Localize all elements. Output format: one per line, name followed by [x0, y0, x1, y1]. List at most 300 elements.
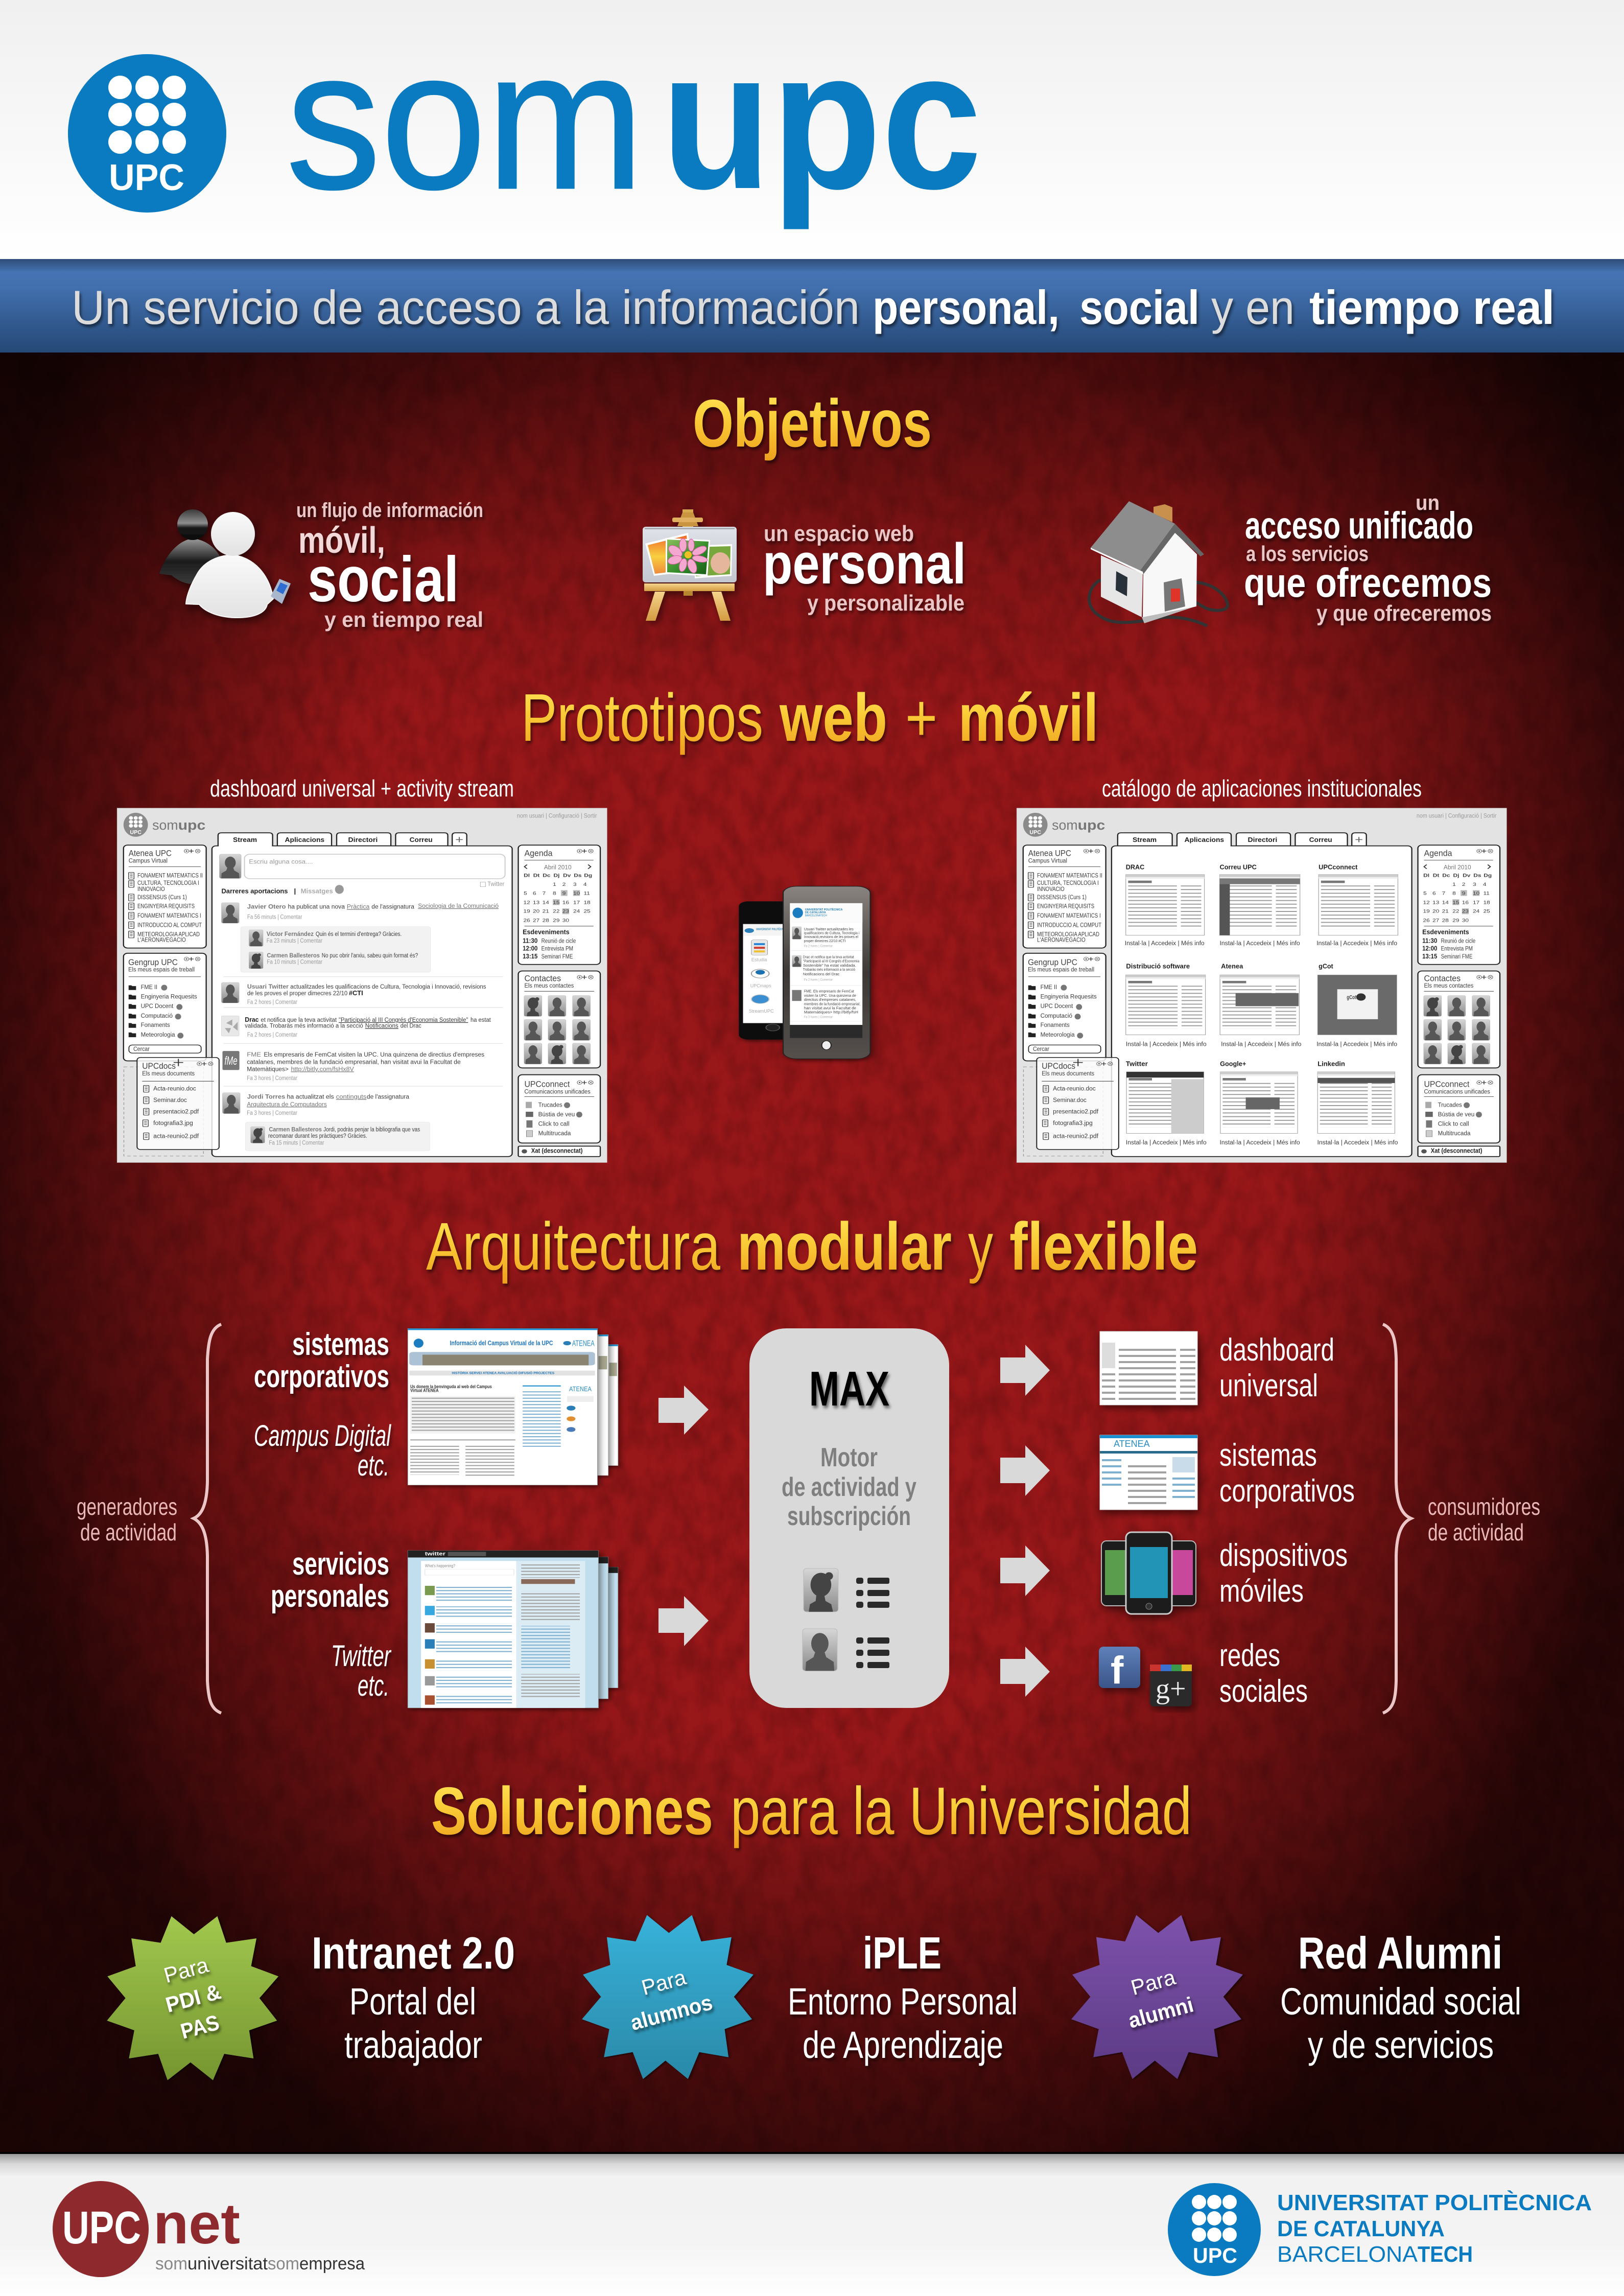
- icon: phones: BARCELONATECH: [805, 913, 827, 917]
- text: objective personal: un espacio web: [764, 521, 914, 546]
- right sidebar widgets: Dv: [563, 873, 571, 878]
- icon: phones: Innovació,revisions de les proves el: [804, 935, 858, 939]
- left sidebar widgets: CULTURA, TECNOLOGIA I: [137, 880, 199, 887]
- text: university name: BARCELONA: [1277, 2242, 1418, 2267]
- left sidebar widgets: FONAMENT MATEMATICS I: [137, 912, 201, 919]
- stream panel: ha publicat una nova: [288, 903, 345, 910]
- stream panel: Darreres aportacions: [221, 888, 288, 895]
- left sidebar widgets: Gengrup UPC: [1028, 958, 1077, 967]
- application catalog grid: Instal·la | Accedeix | Més info: [1316, 940, 1397, 947]
- icon: house: [1089, 501, 1228, 626]
- icon: phones: UNIVERSITAT POLITÈCNICA: [805, 908, 843, 911]
- right sidebar widgets: 2: [562, 882, 566, 887]
- logo: UPCnet: som: [155, 2254, 187, 2274]
- right sidebar widgets: Dl: [1423, 873, 1429, 878]
- stream panel: Carmen Ballesteros: [267, 952, 320, 959]
- stream panel: |: [294, 888, 296, 895]
- left sidebar widgets: Atenea UPC: [1028, 849, 1071, 858]
- right sidebar widgets: Dg: [584, 873, 592, 878]
- right sidebar widgets: 17: [1473, 900, 1479, 905]
- text: redes sociales: redes: [1219, 1638, 1280, 1673]
- text: dispositivos móviles: móviles: [1219, 1574, 1304, 1609]
- stream panel: Sociologia de la Comunicació: [418, 903, 499, 909]
- right sidebar widgets: Reunió de cicle: [542, 938, 576, 945]
- right sidebar widgets: Entrevista PM: [1441, 945, 1473, 952]
- right sidebar widgets: 13: [533, 900, 539, 905]
- right sidebar widgets: 5: [1423, 891, 1427, 896]
- arrow: MAX to dashboard: [1000, 1345, 1050, 1396]
- text: objective personal: y personalizable: [807, 591, 964, 616]
- logo: UPCnet: som: [268, 2254, 299, 2274]
- badge: Para PDI & PAS: PAS: [178, 2010, 222, 2044]
- panel: catalog mockup: [1017, 808, 1507, 1163]
- text: dispositivos móviles: [1219, 1538, 1348, 1609]
- right sidebar widgets: [519, 845, 600, 1157]
- left sidebar widgets: ENGINYERIA REQUISITS: [1037, 903, 1094, 910]
- stream panel: Notificacions: [365, 1022, 398, 1029]
- text: iPLE: Entorno Personal: [788, 1980, 1018, 2023]
- subtitle: y en: [1211, 280, 1295, 334]
- right sidebar widgets: 22: [1452, 909, 1460, 914]
- subtitle: Un servicio de acceso a la información: [72, 280, 860, 334]
- left sidebar widgets: Atenea UPC: [129, 849, 172, 858]
- icon: people: [159, 509, 291, 618]
- icon: phones: Usuari Twitter actualitzades les: [804, 927, 854, 931]
- user subscription 1: [804, 1568, 889, 1612]
- blue subtitle band: [0, 259, 1624, 353]
- right sidebar widgets: 13:15: [1422, 953, 1437, 960]
- stream panel: Fa 3 hores | Comentar: [247, 1074, 297, 1082]
- stream panel: No puc obrir l'arxiu, sabeu quin format és?: [322, 952, 418, 959]
- application catalog grid: Instal·la | Accedeix | Més info: [1316, 1041, 1397, 1048]
- heading: Arquitectura modular y flexible: y: [968, 1209, 993, 1284]
- text: objective social: un flujo de información: [296, 499, 483, 522]
- right sidebar widgets: Abril 2010: [1444, 864, 1471, 871]
- panel: catalog mockup: upc: [1078, 818, 1105, 833]
- left sidebar widgets: L'AERONAVEGACIO: [1037, 936, 1086, 944]
- stream panel: Fa 10 minuts | Comentar: [267, 958, 322, 966]
- left sidebar widgets: UPC Docent: [141, 1003, 173, 1010]
- stream panel: Els empresaris de FemCat visiten la UPC. Una quinzena de directius d'empreses: [264, 1051, 484, 1058]
- icon: phones: proper dimecres 22/10 #CTI: [804, 939, 846, 943]
- application catalog grid: Instal·la | Accedeix | Més info: [1317, 1139, 1398, 1146]
- icon: phones: Fa 3 hores | Comentar: [804, 1015, 833, 1019]
- subtitle: social: [1079, 280, 1199, 334]
- right sidebar widgets: Entrevista PM: [542, 945, 573, 952]
- right sidebar widgets: 25: [584, 909, 591, 914]
- text: Intranet 2.0: Portal del: [349, 1980, 476, 2023]
- panel: dashboard mockup: UPC: [130, 829, 142, 835]
- logo: UPCnet: net: [153, 2192, 240, 2256]
- caption: catalog: catálogo de aplicaciones institucionales: [1102, 775, 1422, 802]
- screenshots: Atenea page stack: ATENEA: [572, 1339, 595, 1348]
- icon: phones: "Participació al III Congrés d'Economia: [803, 959, 859, 964]
- heading: Arquitectura modular y flexible: Arquitectura: [426, 1209, 720, 1284]
- text: sistemas corporativos: [1219, 1438, 1355, 1509]
- text: sistemas corporativos: sistemas: [1219, 1438, 1317, 1473]
- right sidebar widgets: Trucades: [538, 1102, 562, 1109]
- right sidebar widgets: 26: [523, 918, 530, 923]
- stream panel: [212, 844, 512, 1157]
- right sidebar widgets: Dt: [1433, 873, 1440, 878]
- right sidebar widgets: 29: [553, 918, 560, 923]
- tabs: Correu: [1309, 837, 1332, 844]
- logo: UPCnet: [53, 2181, 365, 2277]
- right sidebar widgets: Trucades: [1438, 1102, 1462, 1109]
- text: sistemas corporativos: sistemas: [292, 1327, 389, 1362]
- left sidebar widgets: presentacio2.pdf: [1053, 1108, 1098, 1115]
- tabs: Aplicacions: [1185, 837, 1224, 844]
- stream panel: Fa 2 hores | Comentar: [247, 1032, 297, 1039]
- left sidebar widgets: FONAMENT MATEMATICS I: [1037, 912, 1101, 919]
- stream panel: Usuari Twitter: [247, 983, 289, 991]
- tabs: Aplicacions: [285, 837, 324, 844]
- left sidebar widgets: Meteorologia: [1041, 1032, 1075, 1039]
- stream panel: Pràctica: [347, 903, 369, 910]
- application catalog grid: Distribució software: [1126, 963, 1190, 970]
- right sidebar widgets: 5: [524, 891, 527, 896]
- right sidebar widgets: 4: [583, 882, 587, 887]
- right sidebar widgets: 29: [1452, 918, 1460, 923]
- screenshots: Atenea page stack: Us donem la benvinguda al web del Campus: [410, 1384, 492, 1389]
- screenshots: Atenea page stack: [408, 1328, 618, 1485]
- badge: Para PDI & PAS: [107, 1916, 278, 2080]
- text: servicios personales: personales: [271, 1579, 389, 1614]
- right sidebar widgets: 21: [1442, 909, 1449, 914]
- text: objective personal: personal: [763, 532, 966, 596]
- right sidebar widgets: Contactes: [1424, 974, 1461, 983]
- text: objective unified access: [1244, 490, 1492, 626]
- text: Intranet 2.0: trabajador: [344, 2024, 482, 2066]
- text: university name: TECH: [1418, 2242, 1473, 2267]
- right sidebar widgets: Ds: [574, 873, 582, 878]
- right sidebar widgets: Dt: [533, 873, 540, 878]
- right sidebar widgets: 7: [1442, 891, 1445, 896]
- icon: phones: [739, 886, 870, 1059]
- right sidebar widgets: 21: [543, 909, 549, 914]
- text: objective social: social: [308, 544, 459, 615]
- tabs: Directori: [1248, 837, 1277, 844]
- left sidebar widgets: Campus Virtual: [129, 857, 168, 864]
- text: sistemas corporativos: corporativos: [254, 1359, 389, 1394]
- application catalog grid: UPCconnect: [1319, 864, 1358, 871]
- left sidebar widgets: Computació: [1041, 1012, 1072, 1019]
- left sidebar widgets: FME II: [1041, 984, 1057, 991]
- left sidebar widgets: INTRODUCCIO AL COMPUT: [137, 922, 202, 929]
- stream panel: fMe: [224, 1054, 238, 1067]
- right sidebar widgets: 11:30: [523, 938, 537, 945]
- stream panel: del Drac: [401, 1022, 421, 1029]
- heading: Arquitectura modular y flexible: [426, 1209, 1198, 1284]
- logo: UPC footer: UPC: [1193, 2243, 1237, 2267]
- icon: phones: Fa 2 hores | Comentar: [804, 978, 833, 981]
- text: Red Alumni: Red Alumni: [1298, 1928, 1502, 1978]
- right sidebar widgets: 25: [1484, 909, 1490, 914]
- logo: UPC circle: UPC: [109, 157, 184, 198]
- logo wordmark: somupc: som: [286, 9, 644, 230]
- right sidebar widgets: Click to call: [1438, 1120, 1469, 1128]
- right sidebar widgets: 24: [573, 909, 580, 914]
- stream panel: Javier Otero: [247, 903, 286, 910]
- left sidebar widgets: Els meus espais de treball: [1028, 966, 1094, 973]
- right sidebar widgets: 19: [523, 909, 530, 914]
- left sidebar widgets: fotografia3.jpg: [153, 1120, 193, 1127]
- MAX description: subscripción: [787, 1502, 911, 1531]
- caption: dashboard: dashboard universal + activity stream: [210, 775, 514, 802]
- badge: Para alumni: [1071, 1915, 1243, 2079]
- text: objective unified access: que ofrecemos: [1244, 560, 1492, 605]
- label: consumidores de actividad: consumidores: [1428, 1493, 1540, 1520]
- left sidebar widgets: fotografia3.jpg: [1053, 1120, 1093, 1127]
- icon: phones: Notificacions del Drac: [803, 972, 839, 976]
- application catalog grid: Instal·la | Accedeix | Més info: [1220, 1139, 1300, 1146]
- tabs: [218, 833, 467, 846]
- text: dashboard universal: universal: [1219, 1368, 1318, 1403]
- stream panel: Arquitectura de Computadors: [247, 1101, 327, 1108]
- stream panel: Matemàtiques>: [247, 1066, 289, 1073]
- left sidebar widgets: Els meus documents: [1042, 1070, 1094, 1077]
- application catalog grid: Correu UPC: [1220, 864, 1257, 871]
- left sidebar widgets: Els meus documents: [142, 1070, 195, 1077]
- heading: Objetivos: Objetivos: [693, 386, 932, 461]
- left sidebar widgets: [1023, 845, 1119, 1156]
- stream panel: de les proves el proper dimecres 22/10: [247, 990, 347, 997]
- badge: Para alumnos: [582, 1915, 754, 2079]
- right sidebar widgets: 30: [562, 918, 569, 923]
- header background: [0, 0, 1624, 261]
- right sidebar widgets: Dc: [1442, 873, 1450, 878]
- stream panel: Fa 3 hores | Comentar: [247, 1110, 297, 1117]
- panel: catalog mockup: UPC: [1029, 829, 1041, 835]
- icon: easel: [643, 509, 737, 621]
- left sidebar widgets: DISSENSUS (Curs 1): [137, 894, 187, 901]
- text: objective social: móvil,: [298, 520, 385, 561]
- stream panel: ha actualitzat els: [287, 1093, 334, 1100]
- right sidebar widgets: Reunió de cicle: [1441, 938, 1475, 945]
- thumbnail: corporate systems: ATENEA: [1114, 1439, 1150, 1449]
- right sidebar widgets: 24: [1473, 909, 1479, 914]
- text: sistemas corporativos: [254, 1327, 391, 1482]
- left sidebar widgets: UPCdocs: [1042, 1062, 1075, 1071]
- text: university name: UNIVERSITAT POLITÈCNICA: [1277, 2190, 1592, 2215]
- right sidebar widgets: 18: [1484, 900, 1490, 905]
- arrow: generators to MAX (top): [658, 1386, 709, 1435]
- screenshots: Atenea page stack: Informació del Campus Virtual de la UPC: [450, 1340, 553, 1347]
- right sidebar widgets: Ds: [1473, 873, 1481, 878]
- left sidebar widgets: Fonaments: [141, 1022, 170, 1029]
- right sidebar widgets: Dg: [1484, 873, 1492, 878]
- right sidebar widgets: 8: [553, 891, 556, 896]
- left sidebar widgets: FONAMENT MATEMATICS II: [1037, 872, 1102, 879]
- text: Red Alumni: [1280, 1928, 1521, 2066]
- badge: Para PDI & PAS: PDI &: [163, 1979, 223, 2017]
- right sidebar widgets: 10: [573, 891, 580, 896]
- right sidebar widgets: 15: [553, 900, 560, 905]
- icon: phones: Matemàtiques> http://bitly/fsH: [804, 1011, 858, 1015]
- right sidebar widgets: 8: [1452, 891, 1456, 896]
- text: university name: [1277, 2190, 1592, 2267]
- right sidebar widgets: 16: [1462, 900, 1469, 905]
- heading: Arquitectura modular y flexible: modular: [737, 1209, 952, 1284]
- panel: dashboard mockup: upc: [178, 818, 205, 833]
- label: consumidores de actividad: de actividad: [1428, 1519, 1524, 1545]
- right sidebar widgets: 28: [1442, 918, 1449, 923]
- stream panel: Carmen Ballesteros: [269, 1126, 322, 1133]
- left sidebar widgets: Acta-reunio.doc: [153, 1085, 196, 1092]
- tabs: Correu: [410, 837, 433, 844]
- text: university name: DE CATALUNYA: [1277, 2216, 1445, 2241]
- right sidebar widgets: Seminari FME: [1441, 953, 1472, 960]
- badge: Para alumnos: Para: [639, 1965, 689, 2000]
- icon: phones: UNIVERSITAT POLITÈCNICA: [756, 927, 788, 931]
- left sidebar widgets: Seminar.doc: [1053, 1097, 1087, 1104]
- text: iPLE: iPLE: [863, 1928, 942, 1978]
- badge: Para alumni: Para: [1128, 1965, 1178, 2000]
- right sidebar widgets: 6: [533, 891, 536, 896]
- left sidebar widgets: presentacio2.pdf: [153, 1108, 199, 1115]
- subtitle: [72, 280, 1555, 334]
- stream panel: Jordi, podràs penjar la bibliografia que vas: [323, 1126, 420, 1133]
- right sidebar widgets: 12: [523, 900, 530, 905]
- right sidebar widgets: 27: [533, 918, 539, 923]
- MAX description: Motor: [820, 1443, 878, 1472]
- application catalog grid: Instal·la | Accedeix | Més info: [1126, 1139, 1207, 1146]
- right sidebar widgets: 4: [1483, 882, 1487, 887]
- logo: UPC footer: [1168, 2183, 1261, 2276]
- badge: Para PDI & PAS: Para: [161, 1953, 211, 1987]
- application catalog grid: gCot: [1319, 963, 1333, 970]
- right sidebar widgets: Contactes: [524, 974, 561, 983]
- left sidebar widgets: FME II: [141, 984, 157, 991]
- thumbnail: dashboard: [1100, 1331, 1197, 1405]
- stream panel: http://bitly.com/fsHx8V: [291, 1066, 354, 1073]
- right sidebar widgets: 20: [1432, 909, 1439, 914]
- right sidebar widgets: 3: [573, 882, 577, 887]
- left sidebar widgets: ENGINYERIA REQUISITS: [137, 903, 195, 910]
- icon: phones: StreamUPC: [749, 1009, 774, 1014]
- text: Intranet 2.0: [312, 1928, 515, 2066]
- red textured background: [0, 353, 1624, 2153]
- icon: phones: Sostenible" ha estat validada.: [803, 964, 856, 968]
- right sidebar widgets: 3: [1473, 882, 1476, 887]
- left sidebar widgets: INNOVACIO: [137, 886, 165, 893]
- stream panel: ha estat: [470, 1017, 491, 1023]
- right sidebar widgets: 13:15: [523, 953, 537, 960]
- right sidebar widgets: 20: [533, 909, 539, 914]
- right sidebar widgets: Dl: [524, 873, 530, 878]
- stream panel: Escriu alguna cosa....: [249, 858, 313, 865]
- application catalog grid: Instal·la | Accedeix | Més info: [1126, 1041, 1207, 1048]
- label: generadores de actividad: de actividad: [80, 1519, 177, 1545]
- right sidebar widgets: 1: [1452, 882, 1456, 887]
- stream panel: Missatges: [301, 888, 333, 895]
- stream panel: Fa 23 minuts | Comentar: [267, 938, 322, 944]
- tabs: Stream: [1133, 837, 1157, 844]
- left sidebar widgets: Acta-reunio.doc: [1053, 1085, 1096, 1092]
- right sidebar widgets: Click to call: [538, 1120, 570, 1128]
- stream panel: de l'assignatura: [371, 903, 414, 910]
- right sidebar widgets: 12:00: [523, 945, 537, 952]
- left sidebar widgets: Computació: [141, 1012, 173, 1019]
- right sidebar widgets: 12:00: [1422, 945, 1437, 952]
- stream panel: Fa 56 minuts | Comentar: [247, 913, 302, 921]
- right sidebar widgets: Xat (desconnectat): [1431, 1147, 1482, 1155]
- stream panel: recomanar durant les pràctiques? Gràcies.: [268, 1133, 367, 1139]
- stream panel: de l'assignatura: [367, 1093, 409, 1100]
- subtitle: tiempo real: [1309, 280, 1555, 334]
- icon: phones: Estudia: [751, 957, 767, 963]
- right sidebar widgets: 26: [1423, 918, 1430, 923]
- right sidebar widgets: Multitrucada: [1438, 1130, 1470, 1137]
- text: servicios personales: servicios: [292, 1547, 389, 1582]
- right sidebar widgets: [1418, 845, 1500, 1157]
- panel: dashboard mockup: nom usuari | Configuració | Sortir: [517, 812, 597, 819]
- icon: phones: Fa 2 hores | Comentar: [804, 945, 833, 948]
- label: consumidores de actividad: [1428, 1493, 1540, 1545]
- stream panel: Fa 15 minuts | Comentar: [269, 1139, 324, 1146]
- logo: UPCnet: universitat: [187, 2254, 268, 2274]
- heading: Arquitectura modular y flexible: flexible: [1009, 1209, 1198, 1284]
- badge: Para alumnos: alumnos: [628, 1990, 715, 2035]
- text: objective unified access: acceso unificado: [1245, 504, 1473, 547]
- text: servicios personales: [271, 1547, 392, 1702]
- text: Red Alumni: y de servicios: [1308, 2024, 1494, 2066]
- screenshots: Atenea page stack: ATENEA: [569, 1386, 592, 1393]
- heading: Soluciones para la Universidad: [431, 1773, 1192, 1848]
- text: sistemas corporativos: Campus Digital: [254, 1419, 391, 1452]
- text: servicios personales: Twitter: [331, 1639, 392, 1673]
- icon: phones: qualificacions de Cultura, Tecnologia i: [804, 931, 859, 935]
- application catalog grid: Google+: [1220, 1061, 1246, 1068]
- logo wordmark: somupc: [286, 9, 982, 231]
- left sidebar widgets: METEOROLOGIA APLICAD: [137, 931, 200, 938]
- right sidebar widgets: Esdeveniments: [1422, 929, 1469, 936]
- text: redes sociales: [1219, 1638, 1308, 1709]
- left sidebar widgets: FONAMENT MATEMATICS II: [137, 872, 203, 879]
- left sidebar widgets: acta-reunio2.pdf: [1053, 1133, 1098, 1140]
- left sidebar widgets: UPCdocs: [142, 1062, 176, 1071]
- right sidebar widgets: UPCconnect: [1424, 1080, 1470, 1089]
- text: dashboard universal: [1219, 1332, 1334, 1403]
- left sidebar widgets: CULTURA, TECNOLOGIA I: [1037, 880, 1099, 887]
- icon: phones: membres de la fundació empresarial,: [804, 1002, 860, 1006]
- right sidebar widgets: Bústia de veu: [1438, 1111, 1474, 1118]
- stream panel: #CTI: [349, 990, 363, 997]
- heading: Prototipos web + móvil: móvil: [958, 680, 1098, 755]
- text: Intranet 2.0: Intranet 2.0: [312, 1928, 515, 1978]
- icon: Google+: [1150, 1665, 1192, 1706]
- stream panel: actualitzades les qualificacions de Cultura, Tecnologia i Innovació, revisions: [290, 983, 486, 991]
- right sidebar widgets: 11: [1484, 891, 1490, 896]
- right sidebar widgets: Dc: [543, 873, 551, 878]
- application catalog grid: [1112, 844, 1412, 1157]
- right sidebar widgets: Dj: [1453, 873, 1459, 878]
- left sidebar widgets: Enginyeria Requesits: [1041, 993, 1097, 1000]
- icon: phones: han visitat avui la Facultat de: [804, 1006, 856, 1010]
- heading: Prototipos web + móvil: Prototipos: [521, 680, 763, 755]
- screenshots: Atenea page stack: Virtual ATENEA: [410, 1388, 439, 1393]
- application catalog grid: Instal·la | Accedeix | Més info: [1220, 940, 1300, 947]
- stream panel: continguts: [336, 1093, 366, 1100]
- text: redes sociales: sociales: [1219, 1674, 1308, 1709]
- right sidebar widgets: Comunicacions unificades: [1424, 1088, 1490, 1095]
- left sidebar widgets: Meteorologia: [141, 1032, 175, 1039]
- right sidebar widgets: Comunicacions unificades: [524, 1088, 591, 1095]
- icon: phones: UPCmaps: [750, 983, 771, 989]
- arrow: MAX to corporate systems: [1000, 1445, 1050, 1496]
- application catalog grid: DRAC: [1126, 864, 1145, 871]
- stream panel: Twitter: [487, 881, 505, 888]
